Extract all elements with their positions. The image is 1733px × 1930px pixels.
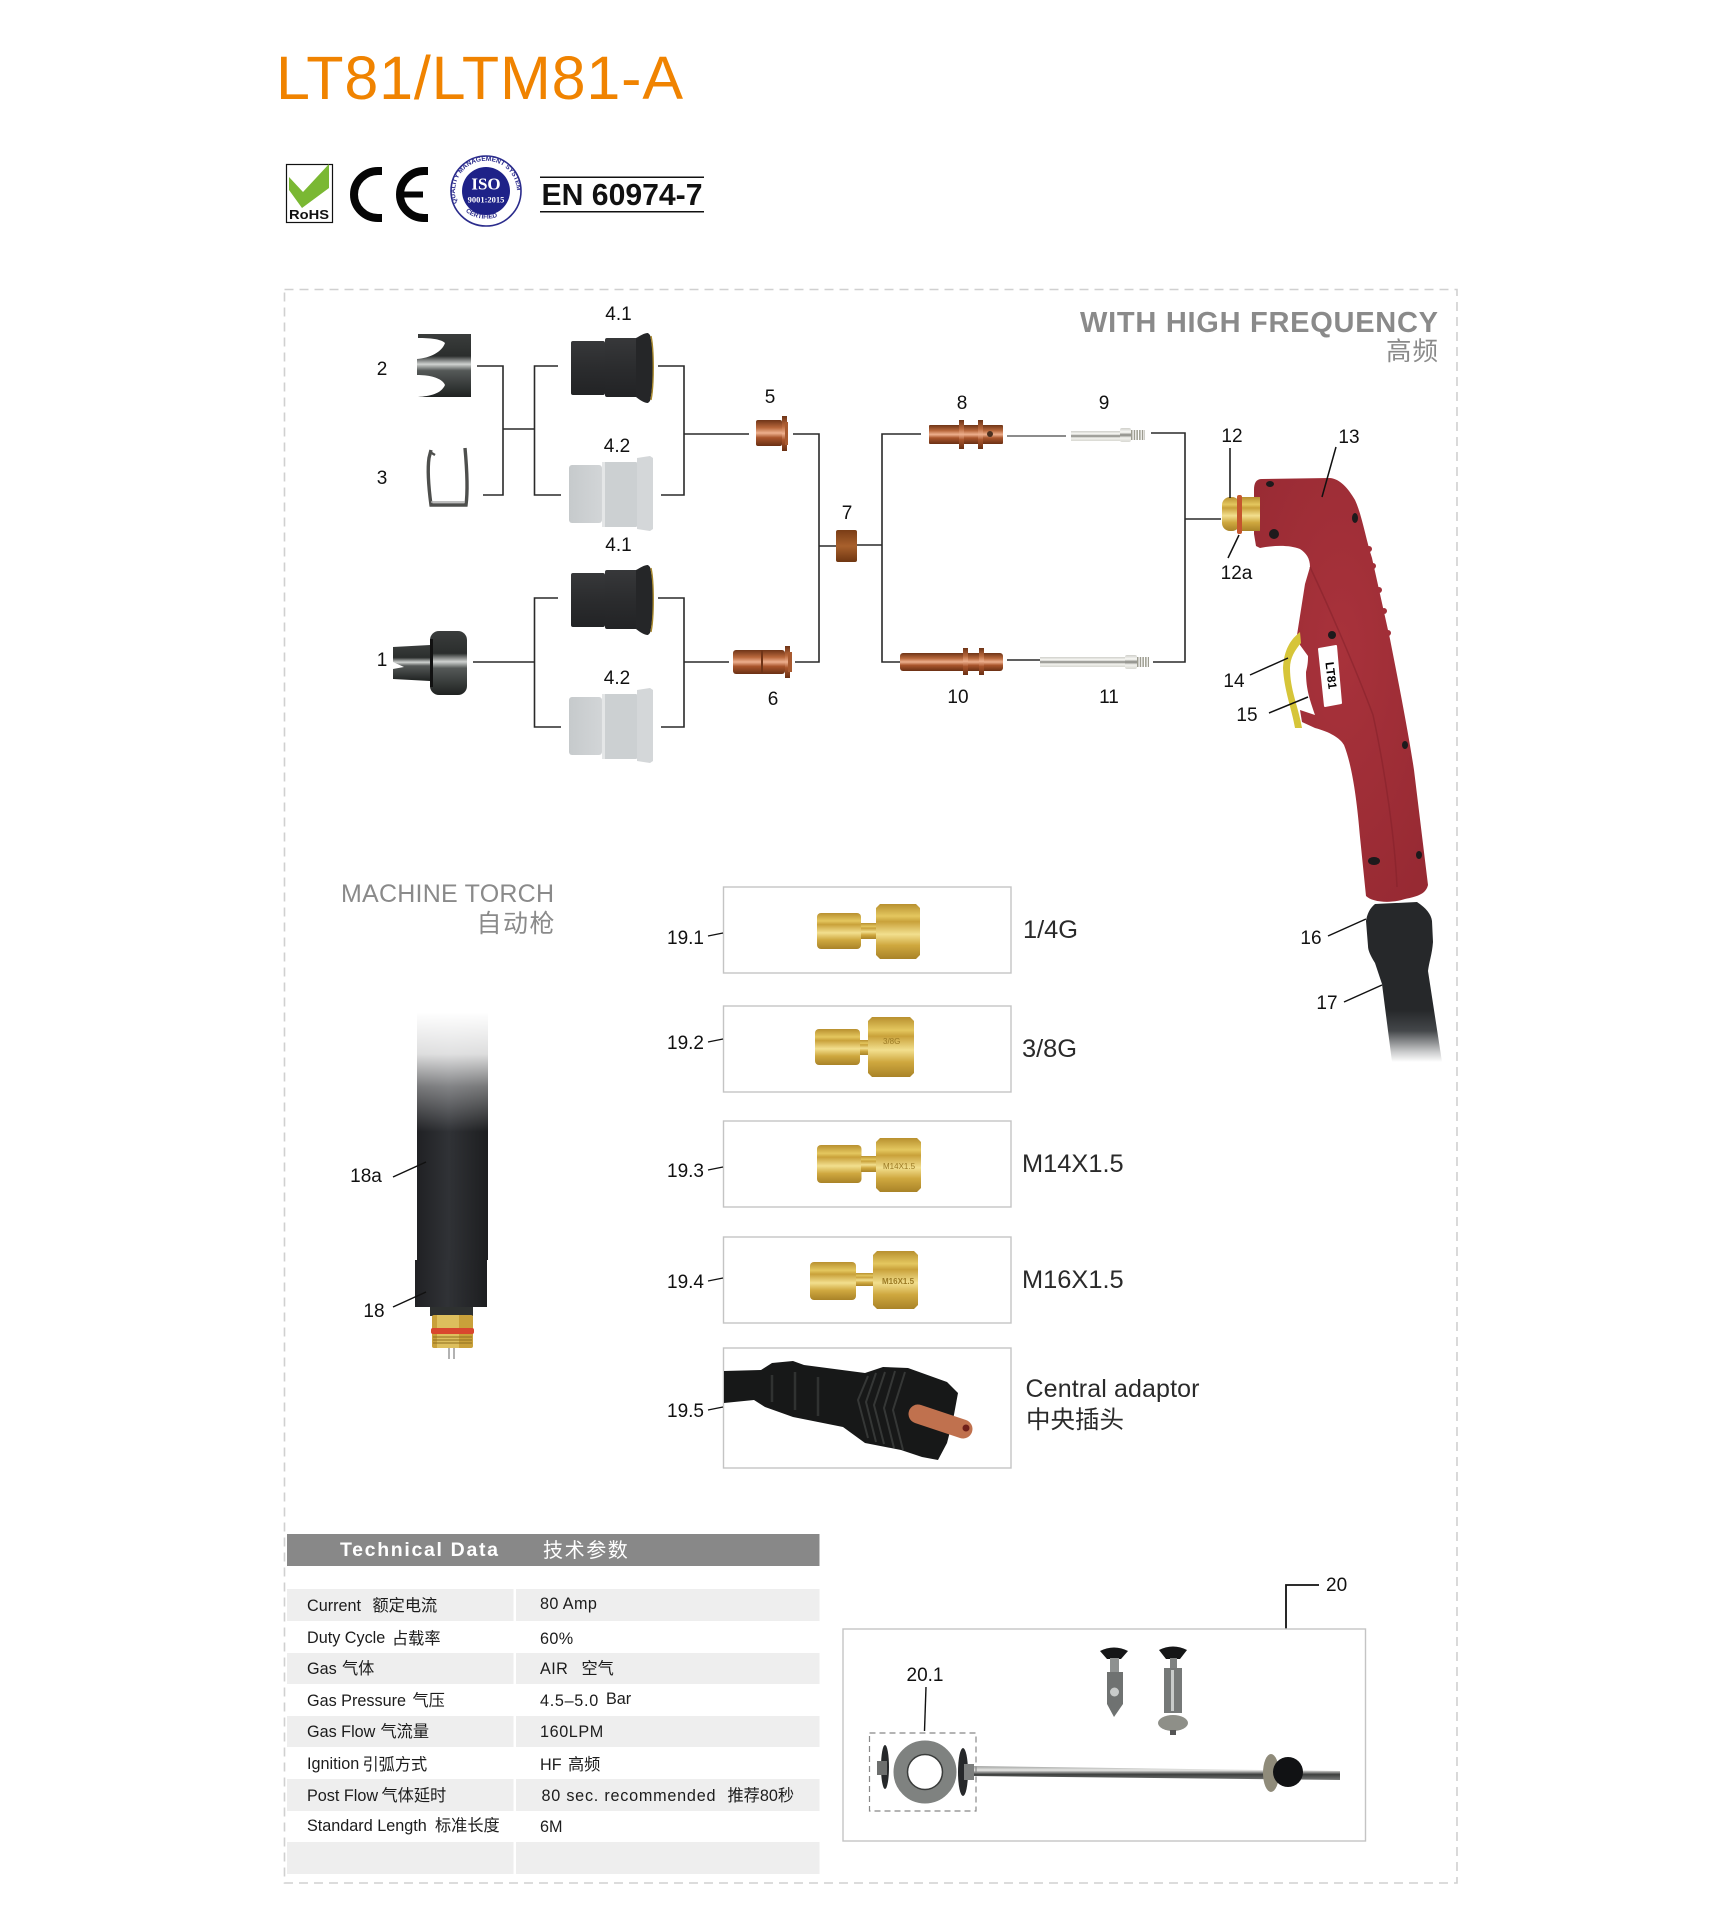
panel border: dashed frame <box>284 290 1457 1883</box>
callout 18a <box>350 1162 426 1187</box>
adaptor 19.1: 19.1 <box>667 928 704 949</box>
row: gas pressure: 4.5–5.0 <box>540 1692 599 1710</box>
torch screws <box>1266 481 1422 865</box>
callout 13: 13 <box>1338 427 1360 448</box>
dashed box and label 20.1: 20.1 <box>907 1665 943 1686</box>
row: ignition: HF <box>540 1756 562 1774</box>
torch back ridges <box>1366 546 1391 636</box>
icon: ISO 9001 seal: ISO <box>471 174 501 194</box>
adaptor 19.5: central adaptor: Central adaptor <box>1026 1375 1200 1403</box>
clamp pin short <box>1100 1648 1128 1717</box>
name plate LT81: LT81 <box>1322 661 1340 690</box>
heading: machine torch <box>341 880 556 938</box>
heading: with high frequency <box>1080 307 1439 366</box>
label 1: 1 <box>377 650 387 671</box>
label 8: 8 <box>957 393 967 414</box>
name plate LT81 <box>1319 646 1341 706</box>
callout 18 <box>363 1292 426 1322</box>
callout 17 <box>1316 985 1382 1014</box>
adaptor 19.4: 19.4 <box>667 1272 704 1293</box>
adaptor 19.3 <box>667 1121 1124 1207</box>
row: current: 额定电流 <box>372 1597 437 1615</box>
accessory frame <box>843 1629 1366 1841</box>
label 4.2: 4.2 <box>604 668 630 689</box>
part 4.2 lower: ceramic shield <box>569 668 653 763</box>
hand torch <box>1222 478 1442 1062</box>
adaptor 19.5: central adaptor: 中央插头 <box>1026 1406 1124 1434</box>
panel: accessory 20 <box>843 1575 1366 1841</box>
adaptor 19.4: M16X1.5 <box>882 1277 915 1286</box>
heading: machine torch: MACHINE TORCH <box>341 880 554 908</box>
row: standard length: 标准长度 <box>435 1817 500 1835</box>
torch red body <box>1254 478 1428 902</box>
callout 18: 18 <box>363 1301 385 1322</box>
body base <box>415 1260 487 1307</box>
standard label: EN 60974-7: EN 60974-7 <box>542 177 702 212</box>
part 4.1 upper: black shield <box>571 304 653 403</box>
bracket and label 20: 20 <box>1326 1575 1347 1596</box>
heading: machine torch: 自动枪 <box>476 910 556 938</box>
o-ring <box>431 1328 474 1334</box>
label 10: 10 <box>947 687 969 708</box>
callout 18a: 18a <box>350 1166 382 1187</box>
row: gas pressure: Gas Pressure <box>307 1692 406 1710</box>
adaptor 19.3: M14X1.5 <box>1022 1150 1124 1178</box>
row: post flow: Post Flow <box>307 1787 378 1805</box>
row: gas flow: 气流量 <box>380 1723 429 1741</box>
icon: RoHS <box>286 164 332 222</box>
callout 14: 14 <box>1223 671 1245 692</box>
part 1: retaining cap <box>377 631 467 695</box>
row: duty cycle: 占载率 <box>392 1630 441 1648</box>
row: standard length: 6M <box>540 1818 562 1836</box>
row: gas: AIR <box>540 1660 568 1678</box>
trigger <box>1283 632 1302 728</box>
callout 12a: 12a <box>1221 563 1253 584</box>
icon: RoHS: RoHS <box>289 207 329 222</box>
label 11: 11 <box>1099 687 1119 708</box>
callout 12a <box>1221 535 1253 584</box>
sleeve <box>417 1013 488 1260</box>
label 4.2: 4.2 <box>604 436 630 457</box>
icon: ISO 9001 seal <box>450 155 522 227</box>
row: duty cycle: 60% <box>540 1630 574 1648</box>
row: post flow: 80 sec. recommended <box>542 1787 716 1805</box>
adaptor 19.1 <box>667 887 1078 973</box>
label 9: 9 <box>1099 393 1109 414</box>
row: standard length <box>307 1817 562 1836</box>
row: current: Current <box>307 1597 361 1615</box>
bracket and label 20 <box>1286 1575 1347 1629</box>
row: gas pressure: 气压 <box>412 1692 445 1710</box>
certification logos <box>286 155 704 227</box>
torch callouts <box>1221 426 1382 1014</box>
label 7: 7 <box>842 503 852 524</box>
icon: ISO 9001 seal: CERTIFIED <box>466 208 497 219</box>
icon: ISO 9001 seal: QUALITY MANAGEMENT SYSTEM <box>452 156 520 204</box>
adaptor 19.2: 3/8G <box>883 1037 900 1046</box>
machine torch <box>415 1012 490 1359</box>
icon: CE mark <box>354 171 428 218</box>
row: post flow: 气体延时 <box>382 1787 446 1805</box>
part 11: tube long <box>1040 655 1149 708</box>
adaptor 19.3: 19.3 <box>667 1161 704 1182</box>
row: gas flow <box>307 1723 604 1741</box>
adaptor 19.1: 1/4G <box>1023 916 1078 944</box>
row: gas: Gas <box>307 1660 337 1678</box>
adaptor 19.2: 19.2 <box>667 1033 704 1054</box>
ring clamp <box>877 1745 974 1796</box>
label 2: 2 <box>377 359 387 380</box>
part 4.1 lower: black shield <box>571 535 653 635</box>
table header <box>287 1534 820 1566</box>
title: LT81/LTM81-A <box>276 44 683 112</box>
label 4.1: 4.1 <box>605 535 632 556</box>
callout 14 <box>1223 658 1288 692</box>
row: gas flow: 160LPM <box>540 1723 604 1741</box>
row: gas flow: Gas Flow <box>307 1723 376 1741</box>
callout 15: 15 <box>1236 705 1258 726</box>
row: post flow: 推荐80秒 <box>728 1787 794 1805</box>
table header: 技术参数 <box>543 1539 629 1562</box>
connector lines between consumables <box>473 366 1221 727</box>
row: post flow <box>307 1787 794 1805</box>
callout 16 <box>1300 919 1366 949</box>
table row bands <box>287 1589 820 1874</box>
row: current <box>307 1595 597 1615</box>
row: gas: 气体 <box>342 1660 374 1678</box>
rod <box>972 1754 1340 1792</box>
pins <box>449 1348 454 1359</box>
neck <box>430 1307 473 1316</box>
heading: with high frequency: 高频 <box>1386 338 1439 366</box>
brass end <box>432 1315 473 1348</box>
cable and black collar <box>1366 902 1442 1062</box>
label 5: 5 <box>765 387 775 408</box>
row: gas pressure: Bar <box>606 1690 632 1708</box>
heading: with high frequency: WITH HIGH FREQUENCY <box>1080 307 1438 339</box>
row: standard length: Standard Length <box>307 1817 427 1835</box>
torch crease <box>1310 567 1397 887</box>
sleeve fade <box>415 1012 490 1132</box>
row: ignition: 引弧方式 <box>362 1756 427 1774</box>
part 10: electrode long <box>900 648 1003 708</box>
row: gas: 空气 <box>582 1660 614 1678</box>
callout 12: 12 <box>1221 426 1243 447</box>
row: gas pressure <box>307 1690 632 1710</box>
dashed box and label 20.1 <box>870 1665 976 1811</box>
part 2: metal swirl cap <box>377 334 471 397</box>
label 6: 6 <box>768 689 778 710</box>
adaptor 19.5: central adaptor <box>667 1348 1200 1468</box>
part 3: U clip <box>377 448 467 505</box>
part 6: copper nozzle long <box>733 646 792 710</box>
label 4.1: 4.1 <box>605 304 632 325</box>
adaptor 19.4 <box>667 1237 1124 1323</box>
row: ignition <box>307 1755 600 1774</box>
brass torch head <box>1222 495 1260 534</box>
part 4.2 upper: ceramic shield <box>569 436 653 531</box>
row: gas <box>307 1660 614 1678</box>
row: ignition: Ignition <box>307 1755 359 1773</box>
callout 16: 16 <box>1300 928 1322 949</box>
part 9: tube short <box>1071 393 1145 442</box>
part 7: swirl ring <box>836 503 857 562</box>
callout 17: 17 <box>1316 993 1338 1014</box>
row: duty cycle: Duty Cycle <box>307 1629 385 1647</box>
adaptor 19.5: central adaptor: 19.5 <box>667 1401 704 1422</box>
row: duty cycle <box>307 1629 574 1648</box>
clamp pin long <box>1158 1646 1188 1735</box>
part 5: copper nozzle <box>756 387 788 451</box>
technical data table <box>287 1534 820 1874</box>
adaptor 19.4: M16X1.5 <box>1022 1266 1124 1294</box>
adaptor 19.3: M14X1.5 <box>883 1162 916 1171</box>
callout 13 <box>1322 427 1360 497</box>
table header: Technical Data <box>340 1539 498 1561</box>
adaptor 19.2: 3/8G <box>1022 1035 1077 1063</box>
icon: ISO 9001 seal: 9001:2015 <box>468 194 504 204</box>
row: current: 80 Amp <box>540 1595 597 1613</box>
part 8: electrode short <box>929 393 1003 449</box>
callout 15 <box>1236 697 1308 726</box>
callout 12 <box>1221 426 1243 498</box>
row: ignition: 高频 <box>568 1756 600 1774</box>
label 3: 3 <box>377 468 387 489</box>
adaptor 19.2 <box>667 1006 1077 1092</box>
